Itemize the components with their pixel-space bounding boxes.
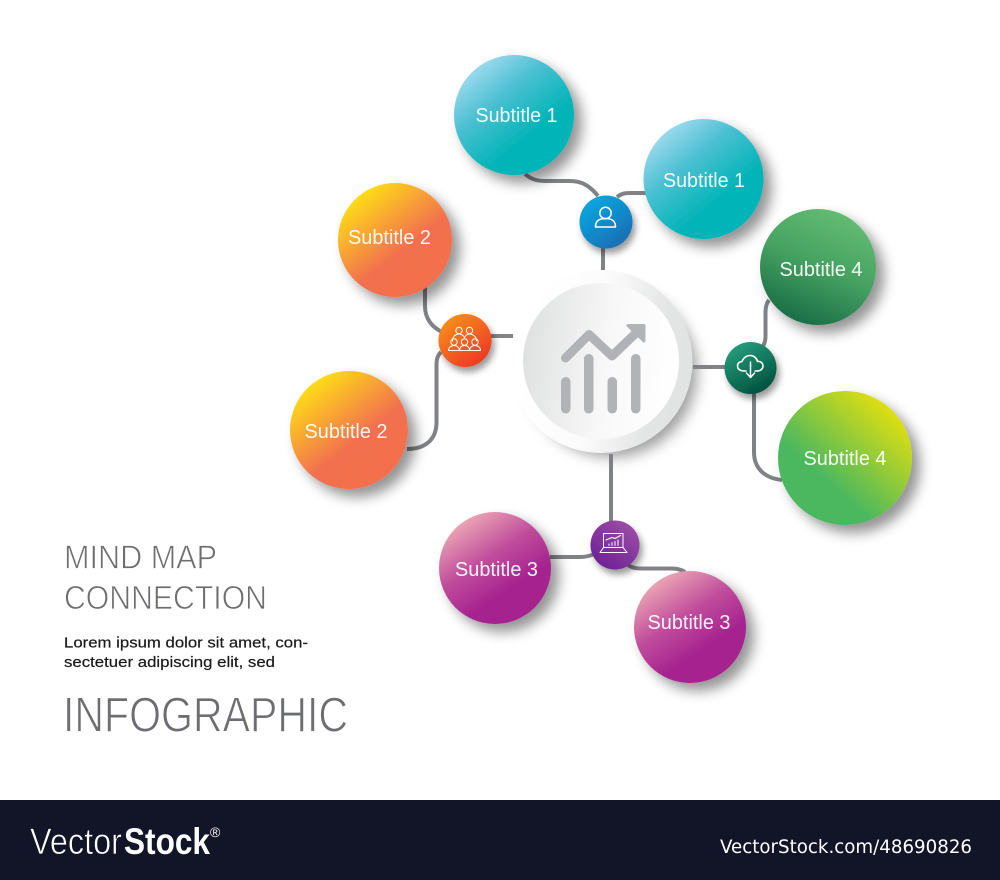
node: Subtitle 3 left: Subtitle 3	[455, 559, 538, 581]
title: mind map connection: MIND MAP	[64, 540, 217, 577]
node: Subtitle 1 right	[644, 119, 764, 239]
node: Subtitle 2 upper: Subtitle 2	[348, 227, 431, 249]
node: Subtitle 1 top: Subtitle 1	[476, 105, 558, 127]
icon: rising chart	[561, 326, 644, 414]
footer logo: ®	[210, 824, 221, 840]
node: Subtitle 4 lower	[778, 391, 912, 525]
node: Subtitle 4 upper: Subtitle 4	[780, 259, 862, 281]
title: mind map connection: CONNECTION	[64, 580, 267, 617]
body text: sectetuer adipiscing elit, sed	[64, 655, 275, 671]
footer logo: Vector	[30, 821, 122, 862]
icon node: cloud download	[724, 342, 776, 394]
central hub circle	[510, 270, 697, 457]
icon node: group of people	[438, 314, 492, 367]
footer logo	[30, 821, 221, 862]
footer url: VectorStock.com/48690826	[720, 836, 972, 858]
node: Subtitle 3 left	[439, 512, 551, 624]
node: Subtitle 2 lower	[290, 371, 408, 489]
node: Subtitle 4 upper	[760, 209, 876, 325]
node: Subtitle 1 right: Subtitle 1	[663, 170, 745, 192]
node: Subtitle 3 right	[634, 571, 746, 683]
title: mind map connection	[64, 540, 267, 617]
node: Subtitle 2 lower: Subtitle 2	[304, 421, 388, 443]
heading: infographic: INFOGRAPHIC	[63, 688, 348, 742]
body text: Lorem ipsum dolor sit amet, con-	[64, 636, 308, 652]
body text	[64, 636, 308, 671]
icon node: laptop with chart	[590, 520, 640, 570]
footer logo: Stock	[124, 821, 210, 862]
footer bar	[0, 800, 1000, 880]
icon node: person	[580, 196, 632, 248]
node: Subtitle 1 top	[454, 55, 574, 175]
node: Subtitle 4 lower: Subtitle 4	[804, 448, 886, 470]
connector lines	[407, 174, 782, 572]
node: Subtitle 3 right: Subtitle 3	[648, 612, 730, 634]
node: Subtitle 2 upper	[338, 183, 452, 297]
